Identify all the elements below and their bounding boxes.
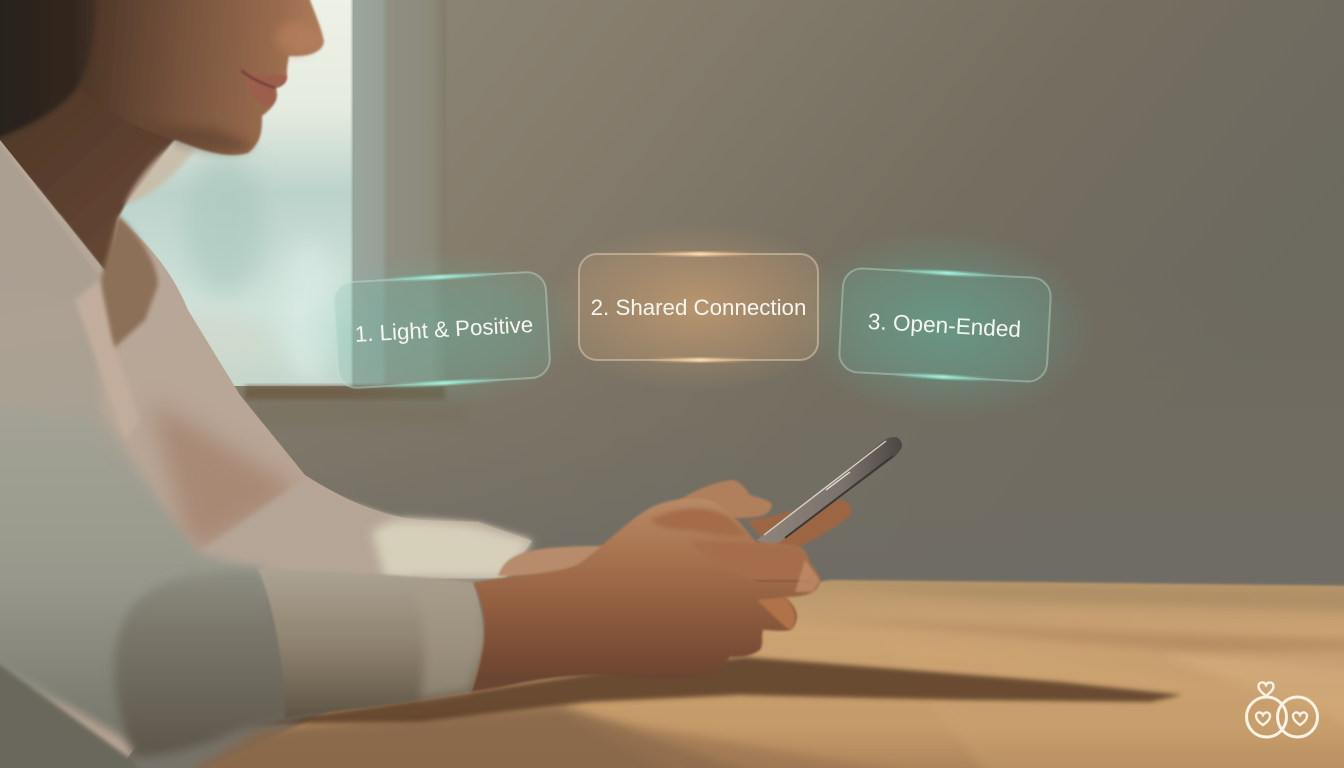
phone — [672, 437, 902, 548]
lips — [241, 70, 287, 107]
window sill — [245, 386, 470, 426]
woman — [0, 0, 532, 768]
cuff end highlight — [410, 578, 482, 698]
upper sleeve forearm — [200, 482, 532, 580]
card 3: Open-Ended — [838, 265, 1052, 385]
card glow: 2 — [548, 222, 848, 392]
card 3: Open-Ended: 3. Open-Ended — [867, 309, 1022, 342]
hair wisp — [124, 142, 195, 205]
shirt left side, shading to sage — [0, 120, 200, 700]
inner collar — [98, 215, 158, 350]
placket — [75, 280, 140, 440]
chin shadow — [140, 125, 255, 152]
sage lower sleeve — [0, 400, 265, 745]
upper arm skin — [498, 545, 640, 576]
index finger — [650, 508, 748, 536]
chest warm fold — [150, 400, 300, 550]
background: wall — [0, 0, 1344, 600]
cuff — [258, 568, 484, 718]
shirt torso — [0, 140, 532, 768]
middle finger — [690, 541, 809, 582]
back fingers — [672, 480, 772, 518]
hand — [471, 499, 820, 692]
card 1: Light & Positive — [333, 269, 551, 391]
card glow: 3 — [790, 222, 1100, 428]
wooden table — [160, 580, 1344, 768]
collar — [0, 130, 98, 302]
nose shading — [276, 22, 316, 54]
face — [60, 0, 324, 155]
neck — [0, 40, 178, 275]
card 2: Shared Connection: 2. Shared Connection — [591, 295, 806, 320]
lit cuff — [372, 520, 532, 578]
ring finger — [757, 597, 795, 630]
sleeve shaded forearm — [114, 570, 300, 757]
phone body — [757, 437, 902, 544]
hand cast shadow on table — [250, 657, 1182, 724]
window with blurred daylight — [60, 0, 353, 386]
hair — [0, 0, 97, 145]
card 1: Light & Positive: 1. Light & Positive — [354, 312, 534, 347]
card glow: 1 — [291, 243, 589, 417]
body shadow below the elbow — [0, 650, 140, 768]
icon: linked wedding rings with hearts — [1246, 682, 1318, 737]
card 2: Shared Connection — [579, 252, 818, 362]
window frame — [352, 0, 446, 386]
knuckle highlight — [795, 560, 820, 592]
